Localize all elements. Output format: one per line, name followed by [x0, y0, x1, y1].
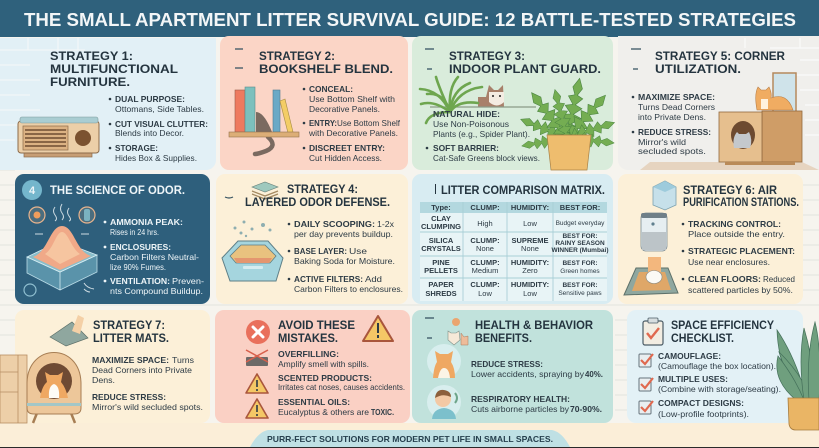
comparison table: Sensitive paws	[558, 290, 602, 297]
benefits text: REDUCE STRESS:	[471, 359, 543, 369]
comparison table: CLUMP:	[470, 203, 500, 212]
checklist text: MULTIPLE USES:	[658, 374, 728, 384]
mistakes list: ESSENTIAL OILS:	[278, 397, 350, 407]
mistakes list	[278, 349, 405, 417]
bullet list: with Decorative Panels.	[308, 128, 398, 138]
icon: litter mat and paw	[50, 315, 88, 346]
bullet list: STRATEGIC PLACEMENT:	[688, 246, 795, 256]
comparison table: HUMIDITY:	[511, 203, 549, 212]
bullet list: DUAL PURPOSE:	[115, 94, 185, 104]
heading: LAYERED ODOR DEFENSE.	[245, 197, 390, 209]
text block: Dead Corners into Private	[92, 365, 192, 375]
bullet list: ENCLOSURES:	[110, 242, 171, 252]
icon: clipboard	[643, 318, 663, 345]
panel: strategy 6 air purification stations	[618, 174, 803, 304]
heading: INDOOR PLANT GUARD.	[449, 64, 601, 76]
heading	[671, 320, 774, 345]
icon: cat and hand	[448, 318, 468, 345]
icon: overfilled box	[246, 350, 268, 366]
bullet list: Place outside the entry.	[688, 229, 785, 239]
heading: HEALTH & BEHAVIOR	[475, 320, 594, 332]
heading	[245, 184, 390, 209]
comparison table: Low	[523, 219, 537, 228]
bullet list: Turns Dead Corners	[638, 102, 715, 112]
comparison table: Green homes	[560, 268, 600, 275]
comparison table: WINNER (Mumbai)	[551, 247, 609, 254]
icon: air purifier	[641, 213, 667, 251]
bullet list: ENTRY:	[309, 118, 337, 128]
comparison table: None	[476, 244, 494, 253]
panel: strategy 4 layered odor defense	[216, 174, 408, 304]
panel: the science of odor	[15, 174, 210, 304]
bullet list: Baking Soda for Moisture.	[294, 256, 395, 266]
comparison table: Type:	[431, 203, 451, 212]
heading: THE SCIENCE OF ODOR.	[50, 185, 185, 197]
heading: AVOID THESE	[278, 320, 355, 332]
heading: STRATEGY 1:	[50, 51, 133, 63]
checkbox compact designs	[639, 401, 653, 414]
icon: litter box	[222, 220, 283, 281]
diagram: ammonia peak over enclosure	[24, 204, 97, 296]
bullet list: Use	[349, 246, 367, 256]
bullet list: Cut Hidden Access.	[309, 153, 382, 163]
heading: SPACE EFFICIENCY	[671, 320, 774, 332]
icon: dresser and cat house	[0, 352, 81, 423]
icon: red x	[246, 320, 270, 344]
icon: warning essential oils	[246, 399, 268, 418]
heading: MULTIFUNCTIONAL	[50, 64, 178, 76]
heading: STRATEGY 2:	[259, 51, 335, 63]
icon: bookshelf with cat tail	[229, 87, 299, 154]
heading: BOOKSHELF BLEND.	[259, 64, 393, 76]
benefits text: RESPIRATORY HEALTH:	[471, 394, 570, 404]
icon: storage ottoman	[18, 117, 99, 157]
panel: strategy 1 multifunctional furniture	[0, 38, 216, 170]
text block: MAXIMIZE SPACE:	[92, 355, 169, 365]
bullet list: AMMONIA PEAK:	[110, 217, 183, 227]
bullet list: Hides Box & Supplies.	[115, 153, 197, 163]
checklist text: (Camouflage the box location).	[658, 361, 776, 371]
comparison table	[420, 202, 609, 301]
text block: Dens.	[92, 375, 115, 385]
comparison table: CLAY	[431, 214, 451, 223]
benefits text: 40%.	[585, 369, 603, 379]
bullet list: per day prevents buildup.	[294, 229, 393, 239]
checklist text: CAMOUFLAGE:	[658, 351, 721, 361]
comparison table: BEST FOR:	[562, 260, 598, 267]
heading: STRATEGY 4:	[287, 184, 358, 196]
heading: FURNITURE.	[50, 77, 130, 89]
bullet list: Ottomans, Side Tables.	[115, 104, 204, 114]
bullet list: DISCREET ENTRY:	[309, 143, 385, 153]
checkbox multiple uses	[639, 378, 653, 391]
text block: Turns	[172, 355, 194, 365]
text block	[92, 355, 203, 412]
comparison table: None	[521, 244, 539, 253]
heading: BENEFITS.	[475, 333, 532, 345]
heading	[475, 320, 594, 345]
bullet list: 1-2x	[377, 219, 395, 229]
heading	[50, 51, 178, 89]
icon: paw on litter mat	[624, 257, 678, 295]
icon: layered stack	[252, 182, 278, 199]
comparison table: PAPER	[428, 280, 454, 289]
bullet list: Blends into Decor.	[115, 128, 184, 138]
comparison table: CLUMP:	[470, 280, 500, 289]
benefits text: Lower accidents, spraying by	[471, 369, 585, 379]
comparison table: SHREDS	[425, 289, 457, 298]
bullet list: Cat-Safe Greens block views.	[433, 153, 540, 163]
bullet list: Mirror's wild	[638, 137, 686, 147]
bullet list	[104, 217, 204, 296]
comparison table: PINE	[432, 258, 450, 267]
bullet list: Plants (e.g., Spider Plant).	[433, 129, 530, 139]
bullet list: Use Bottom Shelf	[337, 118, 401, 128]
icon: potted fern	[518, 76, 617, 170]
bullet list: NATURAL HIDE:	[433, 109, 500, 119]
bullet list	[303, 84, 401, 163]
bullet list	[288, 219, 403, 294]
step badge	[22, 180, 42, 200]
comparison table: Medium	[472, 266, 498, 275]
bullet list: into Private Dens.	[638, 112, 706, 122]
bullet list: Preven-	[172, 276, 204, 286]
heading	[683, 185, 799, 209]
comparison table: Zero	[522, 266, 538, 275]
bullet list	[632, 92, 715, 156]
icon: breathing person	[427, 385, 461, 419]
bullet list: ACTIVE FILTERS:	[294, 274, 363, 284]
floor band	[0, 423, 819, 447]
bullet list: Rises in 24 hrs.	[110, 227, 159, 237]
comparison table: RAINY SEASON	[555, 240, 605, 247]
comparison table: PELLETS	[424, 266, 458, 275]
footer ribbon	[250, 430, 570, 447]
comparison table: HUMIDITY:	[511, 258, 549, 267]
icon: warning scented products	[246, 374, 268, 393]
checklist text	[658, 351, 781, 419]
comparison table: Budget everyday	[556, 220, 605, 227]
bullet list: SOFT BARRIER:	[433, 143, 499, 153]
checklist text: COMPACT DESIGNS:	[658, 398, 744, 408]
bullet list: Carbon Filters to enclosures.	[294, 284, 403, 294]
benefits text	[471, 359, 603, 414]
heading	[278, 320, 355, 345]
comparison table: Low	[523, 289, 537, 298]
mistakes list: TOXIC.	[371, 407, 394, 417]
bullet list: VENTILATION:	[110, 276, 170, 286]
icon: calm cat	[427, 344, 461, 378]
panel: litter comparison matrix	[412, 174, 613, 304]
heading: STRATEGY 7:	[93, 320, 165, 332]
panel: strategy 7 litter mats	[0, 310, 210, 423]
heading	[449, 51, 601, 76]
bullet list: TRACKING CONTROL:	[688, 219, 781, 229]
comparison table: SUPREME	[511, 236, 549, 245]
bullet list: scattered particles by 50%.	[688, 285, 793, 295]
heading: STRATEGY 3:	[449, 51, 525, 63]
checklist text: (Combine with storage/seating).	[658, 384, 781, 394]
comparison table: BEST FOR:	[562, 282, 598, 289]
bullet list: lize 90% Fumes.	[110, 262, 166, 272]
bullet list: STORAGE:	[115, 143, 158, 153]
icon: snake plant in pot	[777, 322, 819, 430]
heading: LITTER COMPARISON MATRIX.	[441, 185, 605, 197]
bullet list: Use Non-Poisonous	[433, 119, 509, 129]
comparison table: CRYSTALS	[421, 244, 461, 253]
text block: Mirror's wild secluded spots.	[92, 402, 203, 412]
mistakes list: Irritates cat noses, causes accidents.	[278, 382, 405, 392]
heading: MISTAKES.	[278, 333, 338, 345]
mistakes list: OVERFILLING:	[278, 349, 339, 359]
comparison table: CLUMP:	[470, 236, 500, 245]
bullet list: Add	[365, 274, 382, 284]
heading: UTILIZATION.	[655, 64, 741, 76]
mistakes list: Amplify smell with spills.	[278, 359, 369, 369]
heading	[655, 51, 786, 76]
panel: avoid these mistakes	[215, 310, 410, 423]
text block: REDUCE STRESS:	[92, 392, 166, 402]
bullet list: BASE LAYER:	[294, 246, 347, 256]
step badge: 4	[29, 185, 36, 197]
bullet list: Use near enclosures.	[688, 257, 770, 267]
panel: strategy 2 bookshelf blend	[220, 36, 408, 170]
heading: CHECKLIST.	[671, 333, 734, 345]
bullet list: Use Bottom Shelf with	[309, 94, 395, 104]
comparison table: BEST FOR:	[560, 203, 600, 212]
bullet list: CONCEAL:	[309, 84, 353, 94]
bullet list: CUT VISUAL CLUTTER:	[115, 119, 208, 129]
bullet list	[682, 219, 795, 295]
icon: corner cabinet with cats and mirror	[640, 73, 819, 170]
heading: STRATEGY 6: AIR	[683, 185, 778, 197]
checklist text: (Low-profile footprints).	[658, 409, 749, 419]
benefits text: Cuts airborne particles by	[471, 404, 570, 414]
bullet list: REDUCE STRESS:	[638, 127, 711, 137]
panel: strategy 5 corner utilization	[618, 36, 819, 170]
comparison table: HUMIDITY:	[511, 280, 549, 289]
title banner	[0, 0, 819, 37]
bullet list: Decorative Panels.	[309, 104, 380, 114]
bullet list	[109, 94, 208, 163]
bullet list	[426, 109, 540, 163]
comparison table: Low	[478, 289, 492, 298]
icon: filter cube	[653, 181, 676, 210]
benefits text: 70-90%.	[570, 404, 602, 414]
panel: health and behavior benefits	[412, 310, 613, 423]
comparison table: CLUMP:	[470, 258, 500, 267]
comparison table: CLUMPING	[421, 222, 461, 231]
bullet list: CLEAN FLOORS:	[688, 274, 761, 284]
bullet list: secluded spots.	[638, 146, 706, 156]
heading: STRATEGY 5: CORNER	[655, 51, 786, 63]
comparison table: SILICA	[429, 236, 454, 245]
icon: large warning triangle	[363, 316, 393, 341]
checkbox camouflage	[639, 354, 653, 367]
mistakes list: Eucalyptus & others are	[278, 407, 369, 417]
heading	[259, 51, 393, 76]
bullet list: Carbon Filters Neutral-	[110, 252, 199, 262]
heading: LITTER MATS.	[93, 333, 169, 345]
icon: cat behind spider plant	[420, 77, 536, 123]
bullet list: Reduced	[763, 274, 795, 284]
mistakes list: SCENTED PRODUCTS:	[278, 373, 372, 383]
bullet list: DAILY SCOOPING:	[294, 219, 375, 229]
title banner: THE SMALL APARTMENT LITTER SURVIVAL GUIDE: 12 BATTLE-TESTED STRATEGIES	[24, 10, 796, 30]
heading	[93, 320, 169, 345]
panel: space efficiency checklist	[627, 310, 803, 423]
comparison table: High	[477, 219, 493, 228]
panel: strategy 3 indoor plant guard	[412, 36, 617, 170]
bullet list: nts Compound Buildup.	[110, 286, 203, 296]
bullet list: MAXIMIZE SPACE:	[638, 92, 715, 102]
footer ribbon: PURR-FECT SOLUTIONS FOR MODERN PET LIFE IN SMALL SPACES.	[267, 434, 553, 444]
comparison table: BEST FOR:	[562, 233, 598, 240]
